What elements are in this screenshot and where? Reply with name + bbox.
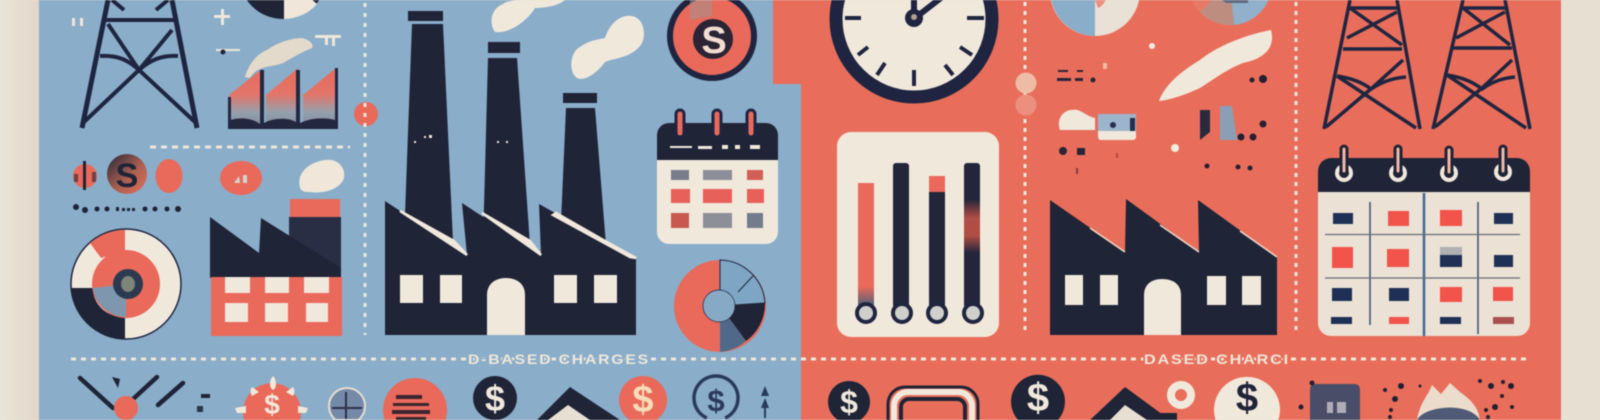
- dotted row: upper left: [150, 146, 350, 148]
- icon: coral disc with stripes: [383, 378, 447, 420]
- icon: coral dollar coin: [619, 376, 667, 420]
- icon: right transmission tower two: [1433, 0, 1530, 129]
- chart: large donut: [71, 229, 181, 339]
- icon: sun dollar coin: [235, 376, 308, 420]
- icon: left transmission tower: [82, 0, 197, 128]
- icon: cream puff: [299, 160, 344, 192]
- icon: blue side calendar: [657, 110, 778, 244]
- dotted row: lower: [71, 358, 1529, 360]
- chart: top pie right: [1050, 0, 1140, 36]
- icon: house coral side: [1090, 387, 1177, 420]
- icon: navy dollar small: [828, 381, 870, 420]
- icon: node network: [80, 377, 210, 420]
- icon: smoke trail: [245, 38, 313, 78]
- icon: outlined dollar ring: $: [707, 383, 725, 418]
- panel: coral right half: [773, 0, 1561, 420]
- scattered marks: bottom right: [1298, 379, 1514, 419]
- chart: pie blue side: [674, 260, 766, 352]
- scattered marks: upper right: [1057, 43, 1155, 82]
- divider nodes: peach dots: [1016, 72, 1036, 116]
- icon: dome bowl: [1417, 383, 1480, 420]
- icon: cream dollar coin: [1214, 376, 1280, 420]
- icon: navy dollar small: $: [840, 384, 858, 420]
- icon: dollar gauge coin: S: [701, 20, 727, 62]
- chart: top pie far right: [1188, 0, 1272, 25]
- dotted column: centre right: [1024, 2, 1026, 335]
- heading: charge label left: D-BASED CHARGES: [468, 351, 650, 367]
- icon: outlined dollar ring: [694, 376, 738, 418]
- icon: sun dollar coin: $: [264, 389, 280, 420]
- icon: wall clock: [836, 0, 992, 97]
- icon: cream cloud with blue box: [1059, 110, 1136, 140]
- icon: navy dollar large: [1011, 375, 1065, 420]
- icon: rounded device screen: [888, 387, 978, 420]
- icon: house blue side: [537, 387, 620, 420]
- icon: cloud upper: [492, 0, 567, 32]
- icon: large factory chimneys: [404, 11, 606, 245]
- icon: small up arrows: [761, 386, 769, 418]
- dotted column: left: [364, 3, 366, 335]
- icon: navy dollar coin: $: [485, 378, 505, 419]
- icon: right transmission tower one: [1324, 0, 1420, 129]
- icon: dollar gauge coin: [670, 0, 754, 78]
- icon: small globe: [329, 388, 365, 420]
- scattered marks: right: [1200, 75, 1267, 170]
- icon: small coral badge: [73, 161, 97, 190]
- heading: charge label right: DASED CHARCI: [1144, 351, 1290, 367]
- icon: small sparkles: [72, 9, 341, 54]
- icon: cream dollar coin: $: [1236, 376, 1258, 420]
- icon: miniature coral factory: [228, 68, 338, 129]
- icon: S coin: S: [116, 157, 138, 195]
- dotted column: far right: [1294, 2, 1298, 335]
- icon: large calendar grid: [1318, 146, 1530, 336]
- panel: blue left half: [39, 0, 802, 420]
- icon: small factory: [210, 199, 342, 336]
- icon: cloud right: [571, 16, 644, 79]
- icon: coral badge with marks: [220, 161, 262, 195]
- icon: coral side factory: [1050, 199, 1277, 335]
- scattered marks: mid right: [1059, 144, 1179, 174]
- icon: S coin: [107, 154, 147, 195]
- icon: coral blob: [156, 159, 182, 193]
- icon: navy dollar large: $: [1027, 376, 1049, 420]
- icon: cream smoke right: [1159, 30, 1272, 101]
- icon: dark block: [1310, 384, 1360, 420]
- icon: navy dollar coin: [473, 376, 517, 420]
- icon: top pie left: [239, 0, 327, 19]
- icon: cream ring: [1171, 385, 1191, 405]
- icon: large factory body: [385, 201, 636, 335]
- dotted legend row: [73, 204, 181, 213]
- chart: cream bar panel: [837, 132, 999, 337]
- divider node: coral dot: [354, 102, 378, 126]
- icon: coral dollar coin: $: [632, 379, 654, 420]
